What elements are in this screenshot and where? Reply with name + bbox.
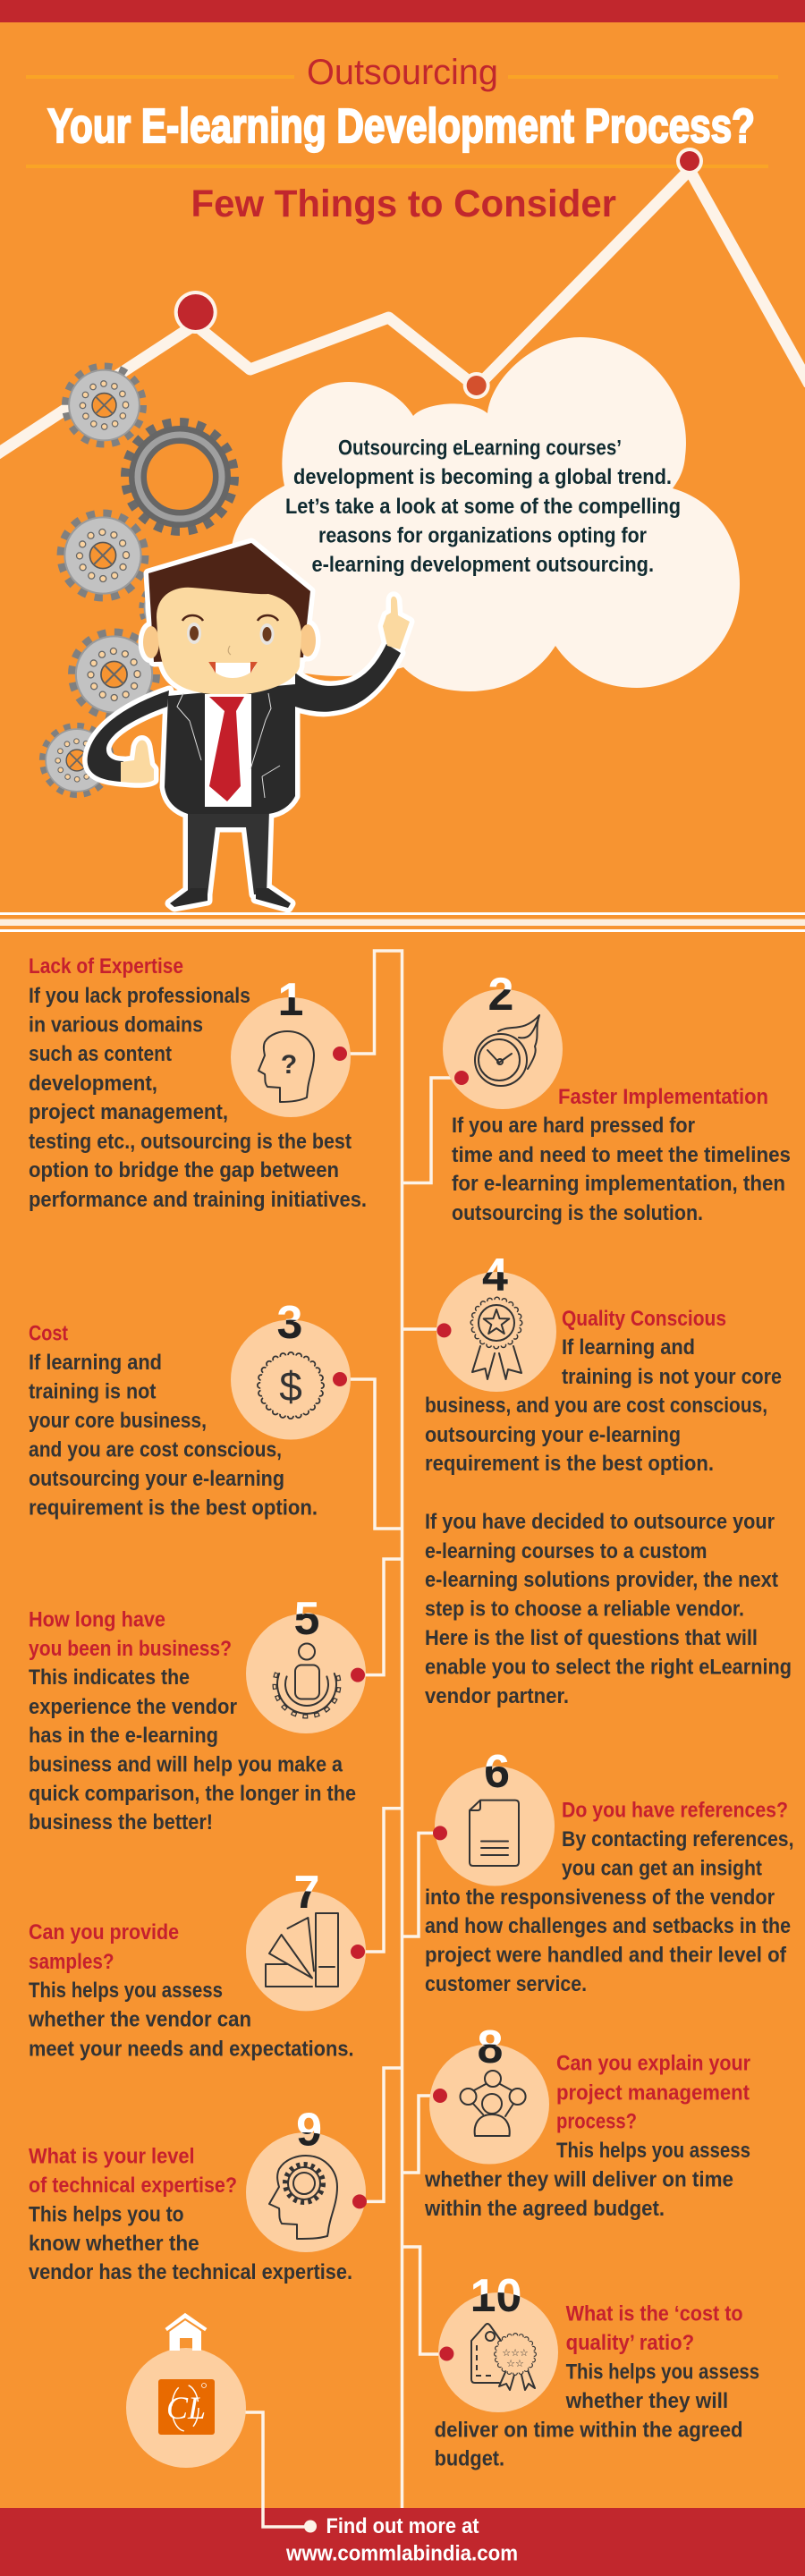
intro text	[285, 436, 681, 577]
item 9 number: 9	[296, 2104, 322, 2156]
vendor selection paragraph	[425, 1510, 792, 1708]
footer text: www.commlabindia.com	[285, 2542, 518, 2566]
item 6 number: 6	[484, 1746, 510, 1798]
item 1 text: Lack of Expertise	[29, 954, 183, 979]
item 3 text: and you are cost conscious,	[29, 1438, 282, 1462]
connector dot	[352, 2194, 367, 2208]
item 10 number	[472, 2279, 521, 2311]
item 10 text: deliver on time within the agreed	[435, 2419, 743, 2442]
item 2 number	[489, 977, 512, 1010]
item 10 text: What is the ‘cost to	[566, 2302, 743, 2326]
connector dot	[454, 1071, 469, 1085]
item 3 badge	[231, 1320, 351, 1440]
item 4 text: Quality Conscious	[562, 1307, 726, 1331]
item 3 number: 3	[277, 1297, 302, 1349]
item 8 text: project management	[556, 2080, 750, 2105]
item 10: cost to quality	[435, 2270, 759, 2471]
item 7: samples	[28, 1867, 366, 2061]
item 7 text: samples?	[29, 1950, 114, 1974]
item 8 text: This helps you assess	[556, 2139, 750, 2163]
item 1 text: If you lack professionals	[29, 984, 250, 1008]
item 2 number: 2	[488, 969, 513, 1021]
connector dot	[433, 1826, 447, 1840]
item 9 text: of technical expertise?	[29, 2174, 237, 2198]
item 7 text: whether the vendor can	[28, 2008, 251, 2032]
item 7 number: 7	[294, 1867, 319, 1919]
item 8: project management	[424, 2021, 750, 2221]
footer text: Find out more at	[326, 2514, 479, 2538]
item 9 text: This helps you to	[29, 2203, 184, 2227]
item 2 badge	[443, 989, 563, 1109]
intro text: e-learning development outsourcing.	[311, 553, 654, 577]
header rule lines	[26, 75, 778, 168]
item 6 text: you can get an insight	[562, 1856, 762, 1880]
item 2 text: If you are hard pressed for	[452, 1114, 695, 1138]
item 5: How long in business	[29, 1593, 366, 1835]
icon: price tag with badge	[471, 2324, 535, 2390]
intro text: Outsourcing eLearning courses’	[338, 436, 622, 460]
item 5 text: quick comparison, the longer in the	[29, 1782, 356, 1806]
item 4 number: 4	[482, 1250, 508, 1301]
footer connector	[245, 2412, 317, 2533]
CommLab logo: CL	[166, 2390, 206, 2426]
timeline connectors	[340, 951, 462, 2508]
item 8 text	[424, 2052, 750, 2221]
item 5 text: business the better!	[29, 1810, 213, 1835]
item 10 text: This helps you assess	[566, 2360, 759, 2385]
item 9 badge	[246, 2132, 366, 2252]
item 6 text: customer service.	[425, 1972, 587, 1996]
item 7 text: This helps you assess	[29, 1979, 223, 2003]
item 4 text: outsourcing your e-learning	[425, 1423, 681, 1447]
item 2 number: 2	[488, 969, 513, 1021]
item 1 text: option to bridge the gap between	[29, 1158, 339, 1182]
item 2 text: Faster Implementation	[558, 1085, 768, 1109]
icon: document	[470, 1801, 519, 1866]
item 6 number: 6	[484, 1746, 510, 1798]
item 4 text: If learning and	[562, 1335, 695, 1360]
item 1 text	[29, 954, 367, 1212]
icon: home	[166, 2316, 206, 2351]
item 10 number: 10	[470, 2270, 521, 2322]
item 10 text: quality’ ratio?	[566, 2331, 694, 2355]
item 5 text: This indicates the	[29, 1665, 190, 1690]
item 4 text	[425, 1307, 782, 1476]
item 3 text: training is not	[29, 1380, 156, 1404]
item 3: Cost	[29, 1297, 351, 1521]
footer text	[285, 2514, 518, 2566]
subtitle: Few Things to Consider	[191, 182, 616, 225]
item 9: technical expertise	[29, 2104, 367, 2284]
item 3 text: your core business,	[29, 1409, 207, 1433]
item 1 text: testing etc., outsourcing is the best	[29, 1130, 352, 1154]
icon: people network	[460, 2071, 526, 2136]
intro text: Let’s take a look at some of the compelling	[285, 495, 681, 519]
icon: head with gear	[269, 2156, 337, 2239]
rising line chart	[0, 148, 805, 458]
item 9 text: know whether the	[29, 2232, 199, 2256]
icon: swatch fan	[266, 1913, 338, 1987]
item 1: Lack of Expertise	[29, 954, 367, 1212]
item 9 text: What is your level	[29, 2145, 195, 2169]
item 8 number: 8	[478, 2021, 503, 2073]
item 1 text: development,	[29, 1072, 157, 1096]
businessman character	[88, 543, 410, 908]
item 5 text: How long have	[29, 1607, 165, 1631]
item 10 text: budget.	[435, 2447, 504, 2471]
item 6 number	[486, 1755, 508, 1787]
connector dot	[333, 1046, 347, 1061]
icon: award rosette	[472, 1300, 521, 1379]
item 10 badge	[438, 2292, 558, 2412]
divider stripes	[0, 912, 805, 932]
item 3 text: If learning and	[29, 1351, 162, 1375]
title: Outsourcing: Outsourcing	[307, 53, 498, 92]
icon: dollar seal	[260, 1355, 321, 1416]
item 9 text	[29, 2145, 352, 2284]
item 5 text: experience the vendor	[29, 1695, 237, 1719]
vendor selection paragraph: step is to choose a reliable vendor.	[425, 1597, 744, 1622]
intro text: reasons for organizations opting for	[318, 523, 647, 547]
item 3 number	[277, 1306, 301, 1338]
item 10 text	[435, 2302, 759, 2471]
vendor selection paragraph: e-learning courses to a custom	[425, 1539, 707, 1563]
item 3 text	[29, 1322, 318, 1521]
item 10 number: 10	[470, 2270, 521, 2322]
icon: head with question mark	[258, 1031, 314, 1102]
item 8 number	[479, 2030, 502, 2063]
connector dot	[436, 1323, 451, 1337]
item 1 number: 1	[278, 974, 303, 1026]
item 2 text: for e-learning implementation, then	[452, 1172, 785, 1196]
item 9 number: 9	[296, 2104, 322, 2156]
item 2 text: time and need to meet the timelines	[452, 1143, 791, 1167]
item 8 text: Can you explain your	[556, 2052, 750, 2076]
item 1 badge	[231, 997, 351, 1117]
item 6: references	[425, 1746, 794, 1996]
item 7 number	[295, 1876, 318, 1908]
item 8 number: 8	[478, 2021, 503, 2073]
item 7 text: meet your needs and expectations.	[29, 2037, 354, 2061]
item 3 text: outsourcing your e-learning	[29, 1467, 284, 1491]
icon: head with question mark: ?	[281, 1050, 297, 1080]
item 2 text	[452, 1085, 791, 1225]
icon: price tag with badge: ☆☆	[506, 2359, 524, 2369]
icon: clock with flames	[475, 1015, 539, 1086]
intro text: development is becoming a global trend.	[293, 465, 672, 489]
connector dot	[351, 1668, 365, 1682]
item 3 number: 3	[277, 1297, 302, 1349]
item 5 text: has in the e-learning	[29, 1724, 218, 1748]
item 8 text: whether they will deliver on time	[424, 2168, 733, 2192]
icon: person in gear	[275, 1644, 339, 1716]
item 6 text: project were handled and their level of	[425, 1944, 787, 1968]
item 4 badge	[436, 1272, 556, 1392]
item 5 text: business and will help you make a	[29, 1753, 343, 1777]
icon: dollar seal: $	[279, 1363, 302, 1410]
item 4: Quality Conscious	[425, 1250, 782, 1476]
item 4 number: 4	[482, 1250, 508, 1301]
vendor selection paragraph: e-learning solutions provider, the next	[425, 1568, 778, 1592]
item 10 text: whether they will	[565, 2389, 728, 2413]
item 5 number: 5	[294, 1593, 319, 1645]
item 1 text: project management,	[29, 1100, 228, 1124]
gears cluster	[44, 368, 233, 793]
connector dot	[333, 1372, 347, 1386]
item 2: Faster Implementation	[443, 969, 791, 1225]
item 6 text	[425, 1799, 794, 1996]
item 5 number: 5	[294, 1593, 319, 1645]
item 9 text: vendor has the technical expertise.	[29, 2260, 352, 2284]
item 7 number: 7	[294, 1867, 319, 1919]
item 8 text: process?	[556, 2110, 637, 2134]
item 5 number	[295, 1602, 318, 1635]
item 5 text: you been in business?	[29, 1637, 232, 1661]
item 1 text: in various domains	[29, 1013, 203, 1038]
cloud speech bubble	[231, 337, 740, 691]
CommLab logo	[158, 2379, 215, 2435]
item 7 badge	[246, 1891, 366, 2011]
item 5 badge	[246, 1614, 366, 1733]
item 1 number	[281, 983, 302, 1015]
vendor selection paragraph: vendor partner.	[425, 1684, 569, 1708]
vendor selection paragraph: If you have decided to outsource your	[425, 1510, 775, 1534]
icon: price tag with badge: ☆☆☆	[502, 2348, 529, 2359]
vendor selection paragraph: Here is the list of questions that will	[425, 1626, 758, 1650]
item 8 text: within the agreed budget.	[424, 2197, 665, 2221]
item 8 badge	[429, 2045, 549, 2165]
connector dot	[433, 2089, 447, 2103]
item 7 text: Can you provide	[29, 1920, 179, 1945]
connector dot	[351, 1945, 365, 1959]
top red band	[0, 0, 805, 22]
connector dot	[439, 2347, 453, 2361]
item 4 text: requirement is the best option.	[425, 1452, 714, 1476]
item 3 text: requirement is the best option.	[29, 1496, 318, 1521]
item 2 text: outsourcing is the solution.	[452, 1201, 703, 1225]
item 5 text	[29, 1607, 356, 1835]
footer red band	[0, 2508, 805, 2576]
item 1 text: such as content	[29, 1042, 172, 1066]
logo badge	[126, 2316, 246, 2468]
item 4 number	[483, 1258, 508, 1291]
item 3 text: Cost	[29, 1322, 68, 1345]
item 7 text	[28, 1920, 354, 2061]
item 9 number	[297, 2113, 320, 2146]
item 6 badge	[435, 1766, 555, 1885]
item 6 text: into the responsiveness of the vendor	[425, 1885, 775, 1910]
item 1 text: performance and training initiatives.	[29, 1188, 367, 1212]
item 1 number: 1	[278, 974, 303, 1026]
item 4 text: training is not your core	[562, 1365, 782, 1389]
